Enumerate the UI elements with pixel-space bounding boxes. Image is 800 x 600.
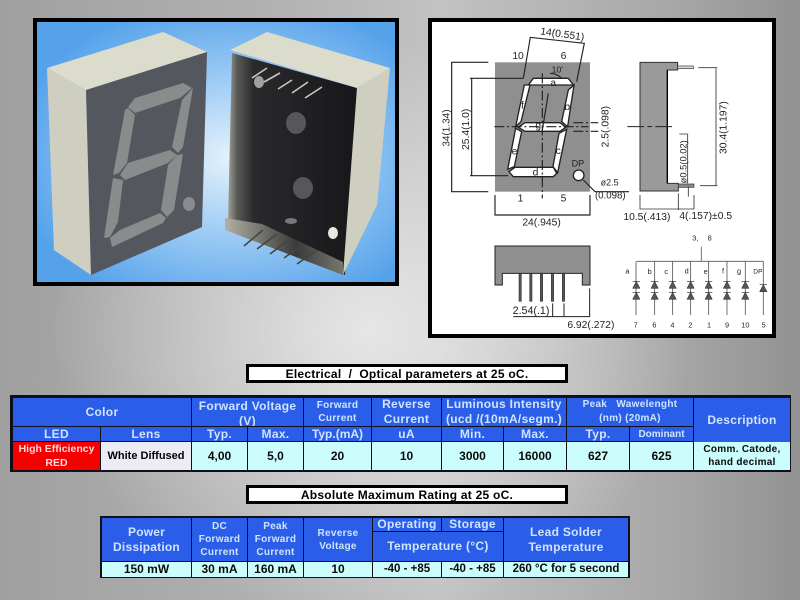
front view drawing: 10 bbox=[512, 51, 524, 62]
table: electrical optical parameters: High Efficiency bbox=[19, 443, 94, 455]
table: absolute maximum rating: Temperature (°C) bbox=[387, 539, 489, 553]
front view drawing bbox=[441, 26, 629, 229]
table: electrical optical parameters: RED bbox=[45, 457, 68, 469]
front view drawing: (0.098) bbox=[595, 191, 626, 202]
table: absolute maximum rating: Power bbox=[128, 524, 165, 538]
table: electrical optical parameters: Comm. Catode, bbox=[703, 444, 781, 455]
front view drawing: 14(0.551) bbox=[540, 26, 585, 43]
circuit diagram: 3, bbox=[692, 233, 698, 242]
circuit diagram: 6 bbox=[652, 320, 656, 329]
table: absolute maximum rating: Operating bbox=[377, 517, 437, 531]
circuit diagram: b bbox=[648, 267, 652, 276]
table: absolute maximum rating: DC bbox=[212, 521, 227, 532]
table: electrical optical parameters: White Diffused bbox=[108, 450, 184, 462]
table: electrical optical parameters: Description bbox=[707, 412, 777, 426]
table: absolute maximum rating: Peak bbox=[263, 521, 288, 532]
table: absolute maximum rating: Lead Solder bbox=[530, 524, 602, 538]
table: electrical optical parameters: 625 bbox=[651, 448, 672, 462]
heading: electrical optical parameters bbox=[246, 364, 568, 383]
front view drawing: c bbox=[556, 146, 561, 157]
table: electrical optical parameters: 4,00 bbox=[208, 448, 231, 462]
table: electrical optical parameters: Forward Voltage bbox=[199, 399, 296, 413]
table: absolute maximum rating: 10 bbox=[331, 562, 345, 576]
table: absolute maximum rating: Temperature bbox=[528, 540, 604, 554]
table: electrical optical parameters: Current bbox=[384, 412, 429, 426]
circuit diagram: 2 bbox=[688, 320, 692, 329]
table: electrical optical parameters: 16000 bbox=[518, 448, 552, 462]
circuit diagram: a bbox=[625, 266, 630, 275]
front view drawing: g bbox=[535, 121, 541, 132]
front view drawing: f bbox=[521, 100, 524, 111]
table: absolute maximum rating: Dissipation bbox=[113, 540, 180, 554]
table: electrical optical parameters: Min. bbox=[460, 426, 485, 440]
table: electrical optical parameters: hand decimal bbox=[708, 457, 776, 468]
table: absolute maximum rating: 150 mW bbox=[124, 562, 169, 576]
icon: display front view bbox=[47, 32, 207, 275]
front view drawing: e bbox=[512, 146, 518, 157]
table: absolute maximum rating: Current bbox=[200, 547, 239, 558]
front view drawing: b bbox=[564, 102, 570, 113]
circuit diagram: g bbox=[737, 266, 741, 275]
circuit diagram: DP bbox=[753, 269, 763, 276]
table: electrical optical parameters: 20 bbox=[331, 448, 344, 462]
front view drawing: 34(1.34) bbox=[441, 109, 452, 147]
table: electrical optical parameters: 5,0 bbox=[267, 448, 284, 462]
table: absolute maximum rating: 160 mA bbox=[254, 562, 297, 576]
side view drawing: ø0.5(0.02) bbox=[679, 140, 689, 183]
table: absolute maximum rating: Voltage bbox=[319, 540, 357, 552]
table: electrical optical parameters: Lens bbox=[131, 426, 161, 440]
front view drawing: ø2.5 bbox=[601, 178, 619, 188]
table: electrical optical parameters: Color bbox=[86, 404, 118, 418]
panel: dimension drawing bbox=[428, 18, 776, 338]
side view drawing: 30.4(1.197) bbox=[719, 101, 730, 154]
table: absolute maximum rating: Storage bbox=[449, 517, 496, 531]
table: electrical optical parameters: Dominant bbox=[638, 428, 685, 440]
heading: absolute maximum rating: Absolute Maximum Rating at 25 oC. bbox=[301, 488, 513, 502]
circuit diagram: 4 bbox=[670, 320, 674, 329]
table: absolute maximum rating: -40 - +85 bbox=[384, 563, 430, 575]
front view drawing: d bbox=[533, 167, 539, 178]
circuit diagram: f bbox=[722, 266, 725, 275]
circuit diagram bbox=[625, 233, 767, 329]
table: absolute maximum rating: -40 - +85 bbox=[449, 563, 496, 575]
side view drawing: 10.5(.413) bbox=[623, 212, 670, 223]
front view drawing: 5 bbox=[561, 194, 567, 205]
bottom view drawing: 6.92(.272) bbox=[567, 320, 614, 331]
circuit diagram: 8 bbox=[708, 233, 712, 242]
table: absolute maximum rating bbox=[100, 516, 630, 578]
side view drawing bbox=[623, 62, 732, 223]
table: absolute maximum rating: Forward bbox=[199, 534, 240, 545]
table: absolute maximum rating: Forward bbox=[255, 534, 296, 545]
table: absolute maximum rating: 260 °C for 5 second bbox=[513, 563, 619, 575]
circuit diagram: d bbox=[685, 266, 689, 275]
table: electrical optical parameters bbox=[10, 395, 791, 472]
table: electrical optical parameters: 3000 bbox=[459, 448, 486, 462]
heading: absolute maximum rating bbox=[246, 485, 568, 504]
front view drawing: 10' bbox=[552, 65, 563, 75]
table: electrical optical parameters: Max. bbox=[521, 426, 549, 440]
table: electrical optical parameters: uA bbox=[398, 426, 415, 440]
front view drawing: 25.4(1.0) bbox=[461, 109, 472, 150]
table: absolute maximum rating: Current bbox=[256, 547, 295, 558]
table: electrical optical parameters: (ucd /(10mA/segm.) bbox=[446, 412, 562, 426]
circuit diagram: e bbox=[704, 267, 708, 276]
table: electrical optical parameters: Typ. bbox=[586, 426, 610, 440]
table: electrical optical parameters: Reverse bbox=[382, 397, 431, 411]
table: electrical optical parameters: Current bbox=[318, 413, 357, 424]
panel: product photo bbox=[33, 18, 399, 286]
bottom view drawing bbox=[495, 246, 614, 331]
table: electrical optical parameters: 10 bbox=[400, 448, 413, 462]
front view drawing: a bbox=[550, 78, 556, 89]
circuit diagram: 10 bbox=[741, 320, 749, 329]
circuit diagram: 1 bbox=[707, 320, 711, 329]
front view drawing: DP bbox=[572, 159, 584, 169]
front view drawing: 2.5(.098) bbox=[600, 106, 611, 147]
table: electrical optical parameters: LED bbox=[44, 426, 69, 440]
circuit diagram: 9 bbox=[725, 320, 729, 329]
table: electrical optical parameters: Typ.(mA) bbox=[312, 426, 363, 440]
table: electrical optical parameters: Luminous Intensity bbox=[446, 397, 562, 411]
circuit diagram: 5 bbox=[762, 320, 766, 329]
front view drawing: 1 bbox=[518, 194, 524, 205]
side view drawing: 4(.157)±0.5 bbox=[679, 211, 732, 222]
table: absolute maximum rating: 30 mA bbox=[201, 562, 238, 576]
front view drawing: 24(.945) bbox=[522, 218, 561, 229]
front view drawing: 6 bbox=[561, 51, 567, 62]
bottom view drawing: 2.54(.1) bbox=[513, 305, 549, 317]
table: electrical optical parameters: Peak Wawelenght bbox=[583, 399, 677, 410]
heading: electrical optical parameters: Electrical / Optical parameters at 25 oC. bbox=[286, 367, 528, 381]
circuit diagram: c bbox=[664, 267, 668, 276]
circuit diagram: 7 bbox=[634, 320, 638, 329]
table: electrical optical parameters: Max. bbox=[262, 426, 289, 440]
table: electrical optical parameters: (nm) (20mA) bbox=[599, 413, 661, 424]
table: electrical optical parameters: Typ. bbox=[207, 426, 232, 440]
table: electrical optical parameters: 627 bbox=[588, 448, 608, 462]
table: electrical optical parameters: Forward bbox=[317, 400, 358, 411]
icon: display back view bbox=[225, 32, 390, 275]
table: absolute maximum rating: Reverse bbox=[317, 528, 359, 538]
